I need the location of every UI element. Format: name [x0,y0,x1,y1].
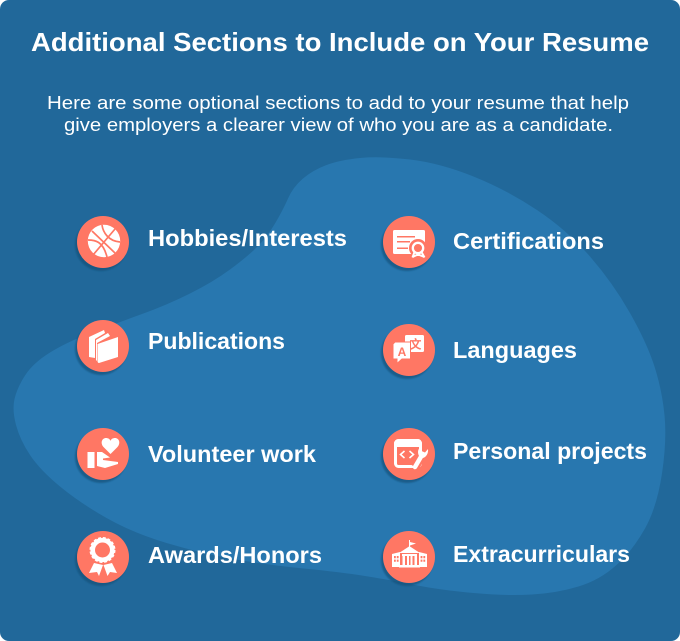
label: Languages [453,337,577,363]
label: Volunteer work [148,441,316,467]
label: Extracurriculars [453,541,630,567]
icon: rosette [89,538,117,576]
title: Additional Sections to Include on Your Resume [31,27,649,57]
item: awards/honors [75,531,322,586]
item: volunteer work [75,428,316,483]
icon: translate bubbles: 文 [409,336,422,352]
label: Awards/Honors [148,542,322,568]
intro text [47,93,629,135]
label: Hobbies/Interests [148,225,347,251]
background blob [14,157,665,595]
intro text: give employers a clearer view of who you are as a candidate. [64,115,613,135]
icon: certificate [393,230,427,258]
item: personal projects [381,428,647,483]
icon: translate bubbles [393,335,424,364]
label: Certifications [453,228,604,254]
icon: translate bubbles: A [398,345,407,359]
icon: code window and wrench [394,439,428,467]
item: hobbies/interests [75,216,347,271]
item: extracurriculars [381,531,630,586]
item: publications [75,320,285,375]
item: certifications [381,216,604,271]
label: Publications [148,328,285,354]
item: languages [381,324,577,379]
icon: school building [392,540,427,568]
intro text: Here are some optional sections to add to your resume that help [47,93,629,113]
icon: hand with heart [88,438,119,468]
label: Personal projects [453,438,647,464]
icon: basketball [88,225,120,257]
icon: books [89,330,118,363]
